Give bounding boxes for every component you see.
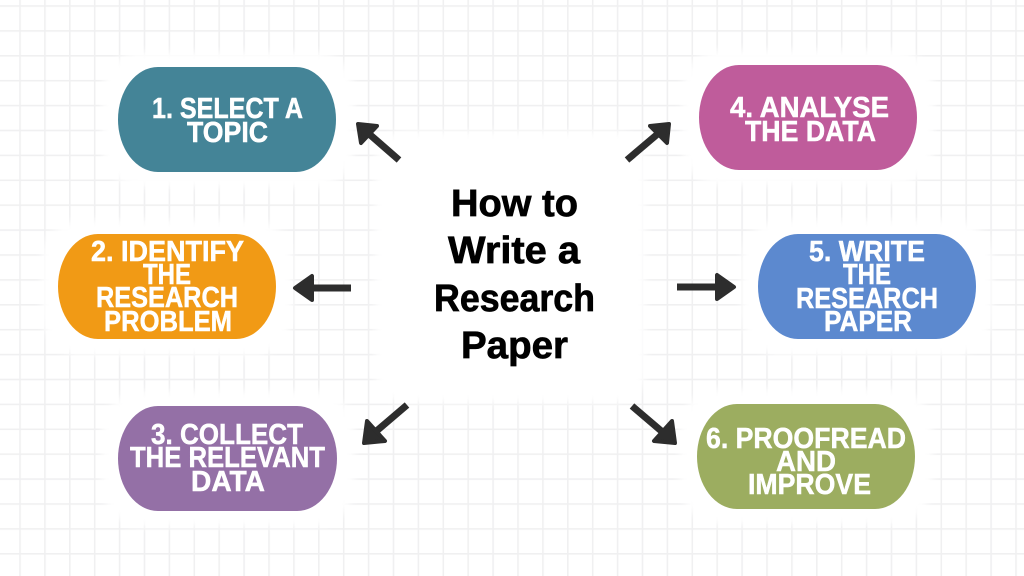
step 5: write the research paper: RESEARCH	[796, 283, 938, 315]
step 6: proofread and improve: IMPROVE	[748, 469, 871, 501]
step 4: analyse the data	[699, 65, 917, 170]
step 2: identify the research problem: 2. IDENTIFY	[91, 236, 244, 268]
arrow to step 1	[358, 124, 399, 160]
step 3: collect the relevant data: 3. COLLECT	[151, 419, 304, 451]
title	[434, 183, 595, 367]
title: Write a	[448, 230, 581, 272]
step 2: identify the research problem: RESEARCH	[96, 282, 238, 314]
step 2: identify the research problem: THE	[143, 259, 191, 291]
arrow to step 4	[627, 124, 669, 160]
step 1: select a topic	[118, 67, 336, 172]
step 3: collect the relevant data	[118, 406, 337, 511]
step 5: write the research paper: PAPER	[824, 306, 912, 338]
arrow to step 2	[295, 276, 351, 300]
title: Paper	[461, 325, 568, 367]
step 5: write the research paper	[758, 234, 976, 339]
step 6: proofread and improve: AND	[776, 446, 836, 478]
step 6: proofread and improve: 6. PROOFREAD	[706, 423, 906, 455]
step 4: analyse the data: THE DATA	[745, 116, 876, 148]
step 3: collect the relevant data: THE RELEVANT	[130, 442, 326, 474]
step 6: proofread and improve	[697, 404, 915, 509]
step 1: select a topic: 1. SELECT A	[152, 93, 303, 125]
arrow to step 6	[632, 406, 675, 443]
step 5: write the research paper: THE	[843, 259, 891, 291]
step 2: identify the research problem	[58, 234, 276, 339]
step 1: select a topic: TOPIC	[187, 117, 268, 149]
step 2: identify the research problem: PROBLEM	[104, 306, 232, 338]
step 5: write the research paper: 5. WRITE	[809, 236, 925, 268]
step 3: collect the relevant data: DATA	[191, 466, 265, 498]
title: How to	[451, 183, 578, 225]
arrow to step 3	[364, 405, 407, 443]
arrow to step 5	[677, 275, 734, 299]
step 4: analyse the data: 4. ANALYSE	[730, 92, 889, 124]
title: Research	[434, 278, 595, 320]
